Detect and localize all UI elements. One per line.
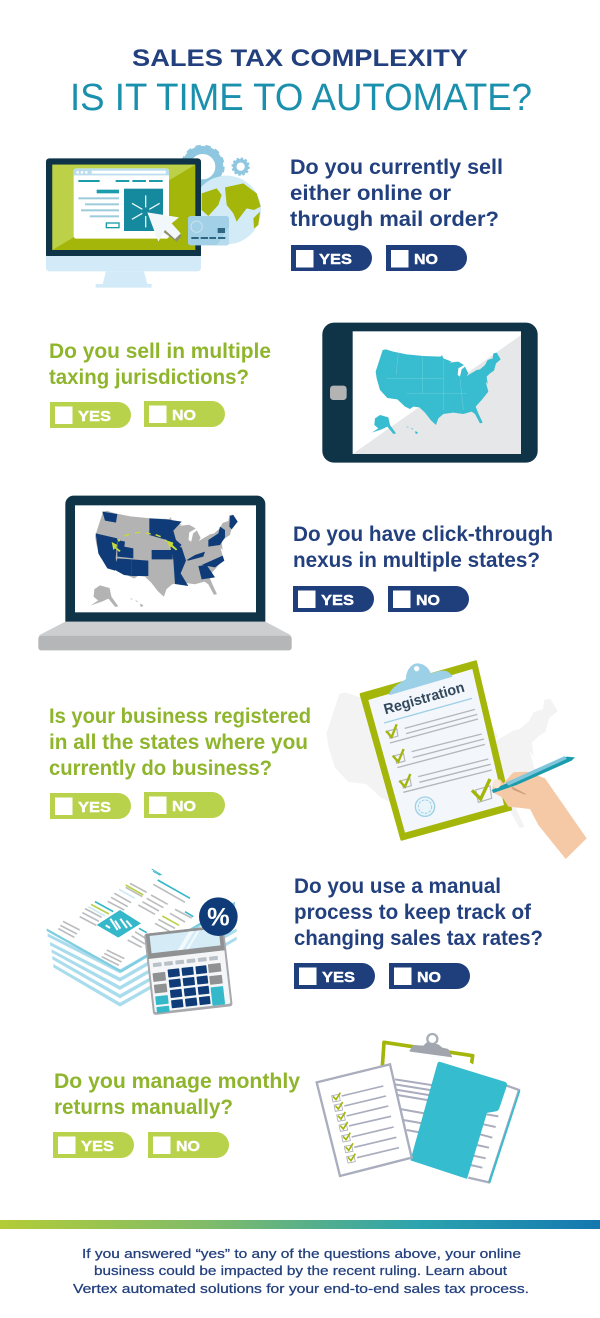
panel: monthly returns <box>53 1034 520 1183</box>
question 1: through mail order? <box>290 208 499 231</box>
icon: clipboard, checklist and folder <box>317 1034 520 1183</box>
question 5: process to keep track of <box>294 901 532 924</box>
question 2: taxing jurisdictions? <box>49 366 249 389</box>
yes button <box>293 586 374 612</box>
question 6: returns manually? <box>54 1096 233 1119</box>
no button <box>389 963 470 989</box>
footer call to action: If you answered “yes” to any of the questions above, your online <box>82 1246 521 1261</box>
icon: laptop with state map <box>38 496 292 650</box>
panel: manual rate tracking <box>47 868 543 1015</box>
no button <box>388 586 469 612</box>
yes button: YES <box>78 408 111 425</box>
footer call to action: business could be impacted by the recent ruling. Learn about <box>94 1263 507 1278</box>
icon: tablet with US map <box>322 323 538 463</box>
yes button: YES <box>321 592 354 609</box>
title: SALES TAX COMPLEXITY <box>132 45 468 72</box>
icon: papers and calculator: % <box>207 903 230 931</box>
panel: multiple jurisdictions <box>49 323 538 463</box>
no button: NO <box>414 251 438 268</box>
question 4: Is your business registered <box>49 705 311 728</box>
question 3 <box>293 523 553 572</box>
yes button: YES <box>322 969 355 986</box>
question 5: Do you use a manual <box>294 875 501 898</box>
question 6 <box>54 1070 300 1119</box>
no button: NO <box>416 592 440 609</box>
no button: NO <box>172 407 196 424</box>
title <box>70 45 532 119</box>
yes button: YES <box>81 1138 114 1155</box>
footer call to action <box>73 1246 529 1296</box>
question 3: nexus in multiple states? <box>293 549 540 572</box>
yes button <box>50 793 131 819</box>
question 1: either online or <box>290 182 451 205</box>
question 4: currently do business? <box>49 757 272 780</box>
gradient divider bar <box>0 1220 600 1229</box>
yes button: YES <box>78 799 111 816</box>
yes button <box>294 963 375 989</box>
question 4 <box>49 705 311 780</box>
no button: NO <box>417 969 441 986</box>
question 2: Do you sell in multiple <box>49 340 271 363</box>
no button <box>148 1132 229 1158</box>
panel: business registration <box>49 662 587 859</box>
yes button: YES <box>319 251 352 268</box>
footer call to action: Vertex automated solutions for your end-to-end sales tax process. <box>73 1281 529 1296</box>
yes button <box>53 1132 134 1158</box>
no button: NO <box>172 798 196 815</box>
no button <box>144 401 225 427</box>
panel: online or mail order <box>46 147 503 288</box>
no button: NO <box>176 1138 200 1155</box>
no button <box>144 792 225 818</box>
question 5: changing sales tax rates? <box>294 927 543 950</box>
yes button <box>50 402 131 428</box>
icon: registration clipboard and hand <box>326 662 587 859</box>
yes button <box>291 245 372 271</box>
icon: papers and calculator <box>47 868 238 1015</box>
icon: monitor with globe, gears and card <box>46 147 261 288</box>
question 5 <box>294 875 543 950</box>
panel: click-through nexus <box>38 496 553 650</box>
question 4: in all the states where you <box>49 731 308 754</box>
question 6: Do you manage monthly <box>54 1070 300 1093</box>
no button <box>386 245 467 271</box>
title: IS IT TIME TO AUTOMATE? <box>70 77 532 119</box>
question 1 <box>290 156 503 231</box>
icon: registration clipboard and hand: Registration <box>382 680 467 718</box>
question 2 <box>49 340 271 389</box>
question 1: Do you currently sell <box>290 156 503 179</box>
question 3: Do you have click-through <box>293 523 553 546</box>
